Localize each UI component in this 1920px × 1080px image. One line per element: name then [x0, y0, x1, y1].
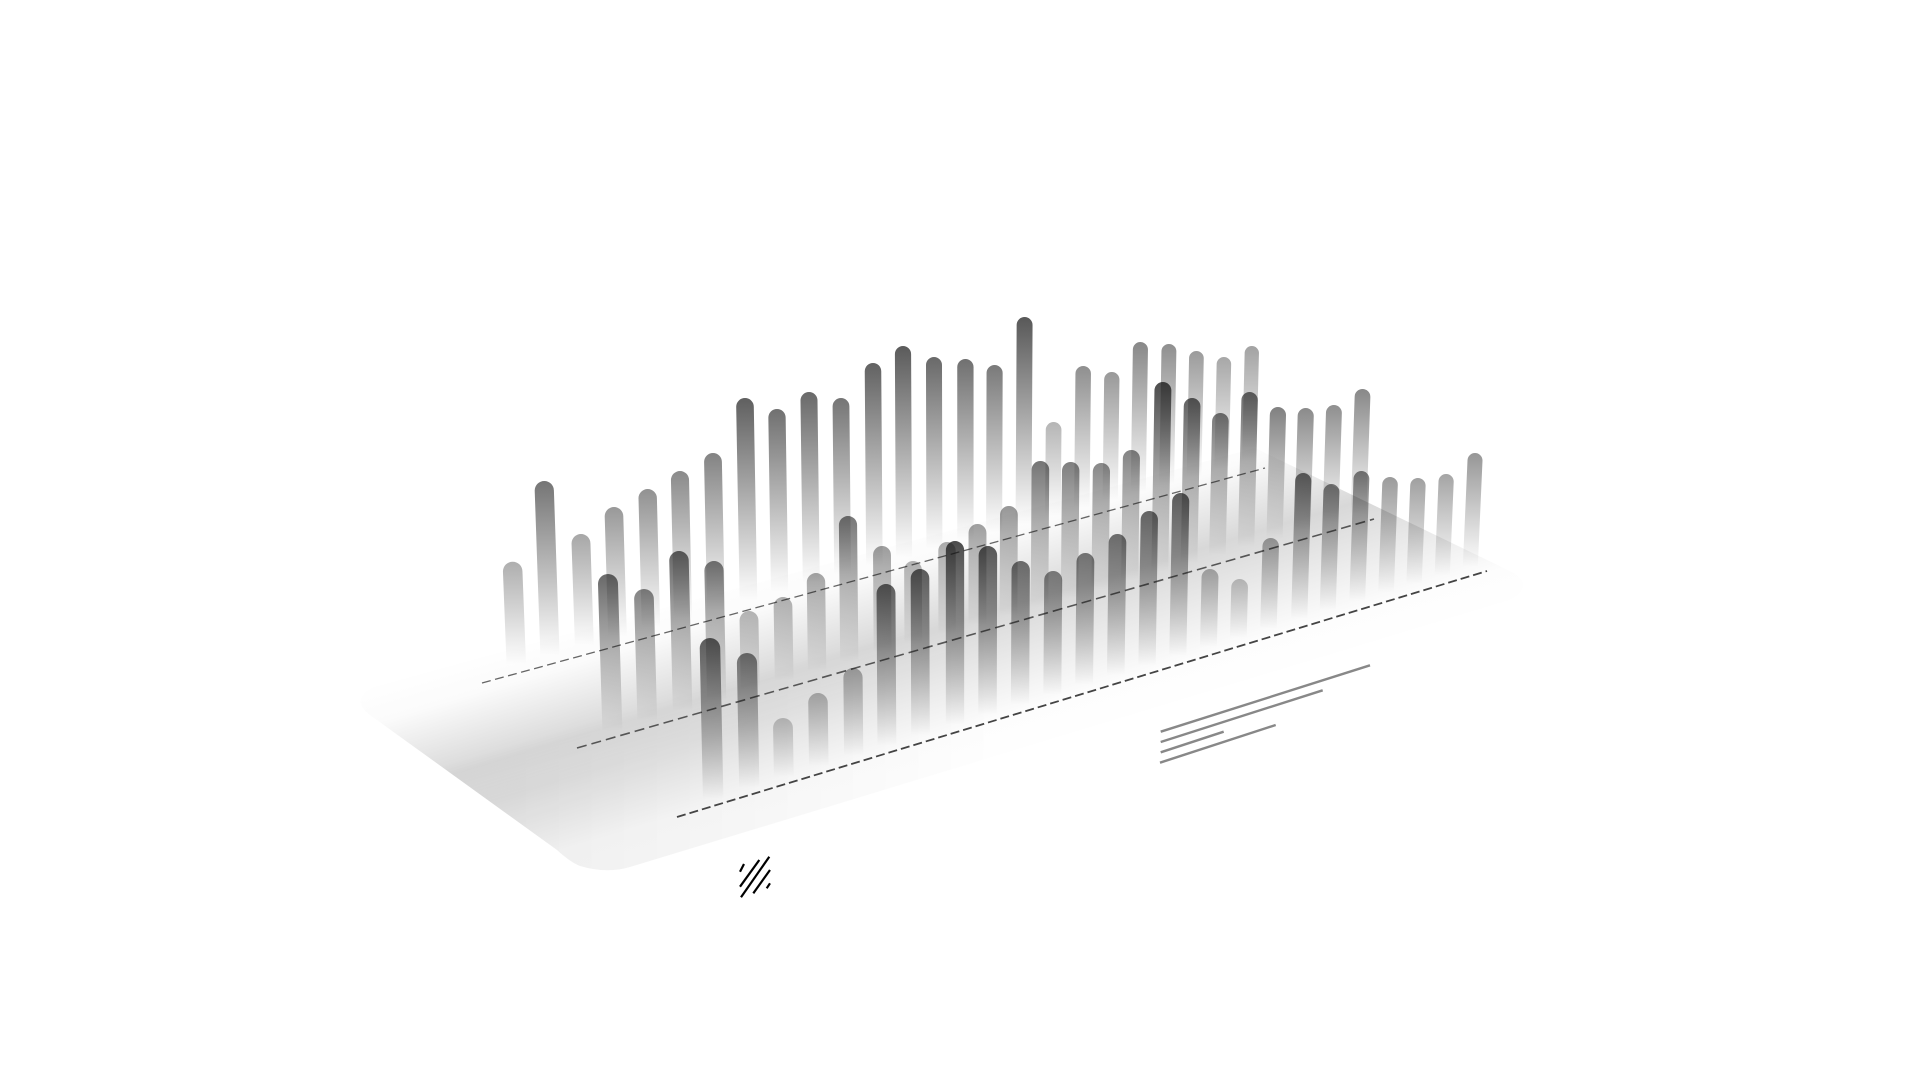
infographic: isometric bar chart illustration [389, 317, 1488, 898]
bar row: front [700, 453, 1482, 799]
dashed axis line: middle row [577, 519, 1374, 748]
bar row: middle [598, 382, 1370, 731]
dashed axis line: back row [482, 468, 1265, 683]
platform: rounded grey floor [361, 448, 1523, 870]
icon: hatch mark [740, 857, 770, 897]
dashed axis line: front row [677, 571, 1487, 817]
bar row: back [503, 317, 1259, 665]
caption placeholder lines [1160, 665, 1370, 763]
